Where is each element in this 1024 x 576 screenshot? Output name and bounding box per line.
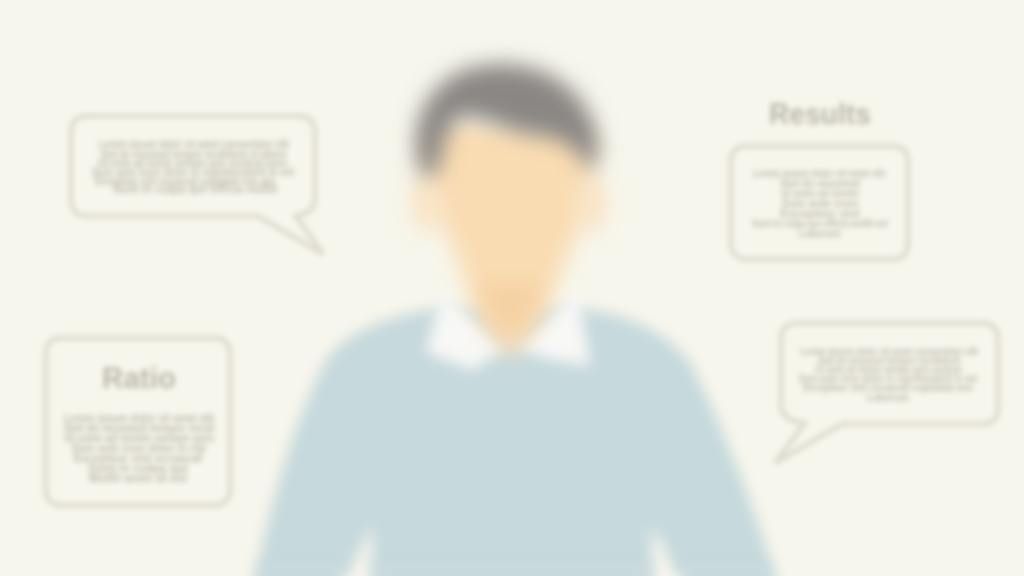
box text xyxy=(64,413,214,485)
collar xyxy=(426,292,590,370)
speech bubble: top left xyxy=(71,116,323,254)
heading: top right: Results xyxy=(769,98,871,131)
bubble text xyxy=(92,139,294,196)
bubble text: Duis aute irure dolor in reprehenderit in vol xyxy=(92,167,294,179)
bubble text: Excepteur sint occaecat cupidatat non pro xyxy=(95,176,275,188)
bubble text: Sunt in culpa qui officia mollit xyxy=(112,184,278,196)
bubble text: Sed do eiusmod tempor incididunt xyxy=(818,355,960,367)
ears xyxy=(412,177,606,233)
box text: Sed do eiusmod xyxy=(780,178,860,190)
neck and face xyxy=(426,125,592,358)
box text: Sunt in culpa qui xyxy=(88,463,188,475)
box text: Lorem ipsum dolor sit amet elit xyxy=(64,413,214,425)
box text: Laborum xyxy=(799,228,841,240)
box text: Duis aute irure dolor in rep xyxy=(72,443,206,455)
person figure xyxy=(255,64,775,576)
bubble text: Lorem ipsum dolor sit amet consectetur elit xyxy=(99,139,289,151)
box text: Excepteur sint xyxy=(780,208,860,220)
bubble text: Sed do eiusmod tempor incididunt ut labore xyxy=(101,149,287,161)
sweater bottom edge fill xyxy=(256,552,774,576)
bubble text: Ut enim ad minim veniam quis nostrud exerc xyxy=(98,158,288,170)
box heading: Ratio xyxy=(102,362,176,395)
bubble text: Laborum xyxy=(867,392,909,404)
box text: Lorem ipsum dolor sit amet elit xyxy=(753,168,885,180)
bubble text: Ut enim ad minim veniam quis nostrud xyxy=(815,364,961,376)
bubble text xyxy=(799,346,978,404)
box text: Sunt in culpa qui officia mollit est xyxy=(752,218,888,230)
bubble text: Lorem ipsum dolor sit amet consectetur elit xyxy=(800,346,978,358)
hair xyxy=(416,64,599,176)
speech bubble: bottom right xyxy=(775,323,998,463)
sweater xyxy=(255,308,775,576)
bubble text: Excepteur sint occaecat cupidatat non xyxy=(803,382,973,394)
bubble text: Duis aute irure dolor in reprehenderit in vol xyxy=(799,373,977,385)
text box: top right xyxy=(731,146,908,259)
neck shadow xyxy=(475,285,545,340)
box text: Mollit anim id est xyxy=(89,473,187,485)
box text: Ut enim ad minim veniam quis xyxy=(64,433,214,445)
box text: Excepteur sint occaecat xyxy=(74,453,202,465)
text box: bottom left xyxy=(46,338,230,505)
box text xyxy=(752,168,888,240)
box text: Sed do eiusmod tempor incid xyxy=(64,423,214,435)
box text: Ut enim ad minim xyxy=(781,188,859,200)
box text: Duis aute irure xyxy=(782,198,858,210)
